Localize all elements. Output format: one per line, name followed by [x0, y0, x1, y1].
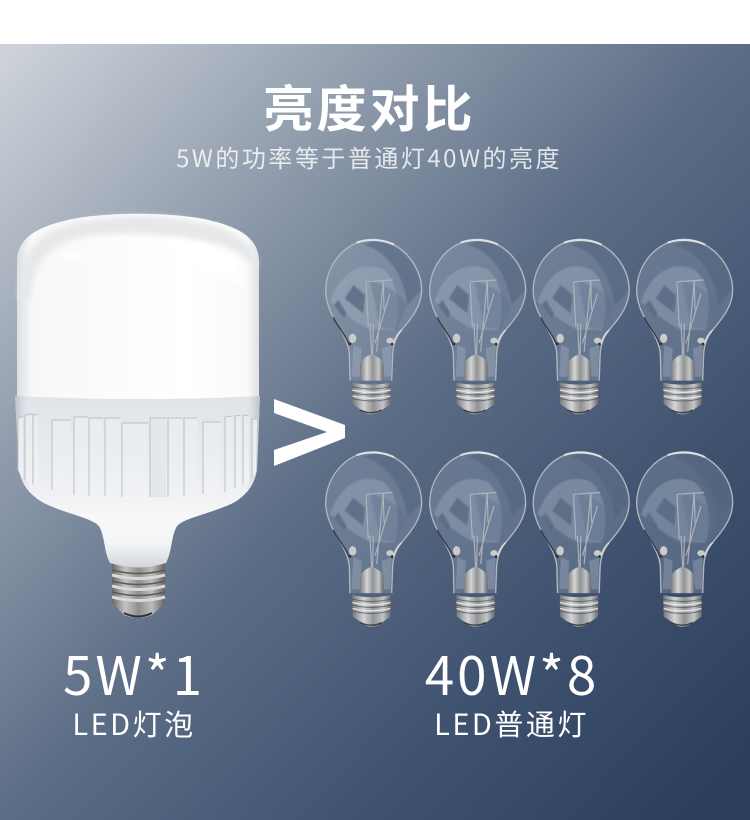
- label: LED普通灯: LED普通灯: [434, 702, 589, 744]
- bulb fin edge lines: [18, 414, 257, 497]
- bulb row 1 column 3: [533, 239, 629, 414]
- bulb row 2 column 1: [326, 452, 422, 627]
- icon: eight incandescent bulbs: [326, 239, 733, 627]
- label: LED灯泡: LED灯泡: [72, 702, 196, 744]
- bulb housing with neck: [15, 396, 260, 568]
- bulb row 2 column 3: [533, 452, 629, 627]
- label: 5W*1: 5W*1: [63, 635, 205, 711]
- label: 40W*8: 40W*8: [425, 635, 599, 711]
- bulb vent fins: [18, 414, 257, 497]
- bulb row 2 column 2: [430, 452, 526, 627]
- bulb screw base: [112, 563, 165, 618]
- bulb white dome: [17, 214, 259, 399]
- bulb row 1 column 2: [430, 239, 526, 414]
- icon: large LED bulb: [15, 214, 260, 618]
- subtitle: 5W的功率等于普通灯40W的亮度: [176, 139, 562, 174]
- arrow: greater-than sign: [274, 399, 345, 466]
- bulb row 1 column 4: [637, 239, 733, 414]
- bulb row 2 column 4: [637, 452, 733, 627]
- bulb row 1 column 1: [326, 239, 422, 414]
- title: 亮度对比: [264, 70, 476, 142]
